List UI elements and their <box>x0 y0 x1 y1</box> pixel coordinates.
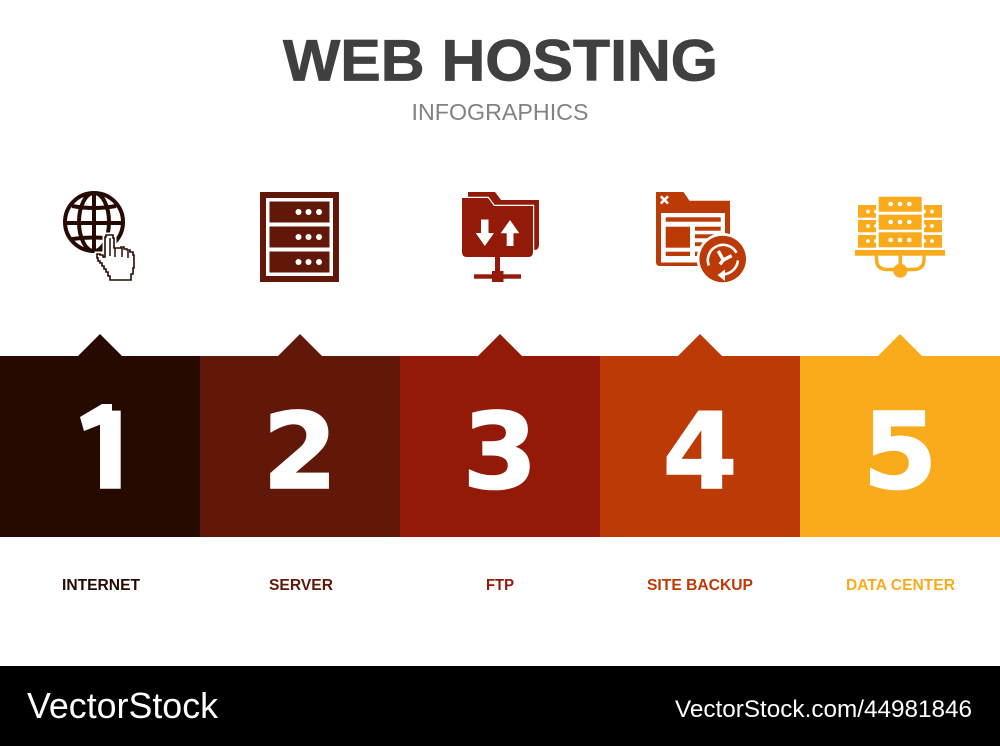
title: WEB HOSTING <box>283 28 718 94</box>
label: internet: INTERNET <box>62 577 141 594</box>
footer url: VectorStock.com/44981846 <box>675 696 972 723</box>
panel: step 1: 1 <box>52 391 156 513</box>
label: server: SERVER <box>269 577 333 594</box>
subtitle: INFOGRAPHICS <box>412 99 588 125</box>
panel: step 3 <box>400 334 600 537</box>
panel: step 1 <box>0 334 200 537</box>
label: ftp: FTP <box>486 577 514 594</box>
label: data center: DATA CENTER <box>846 577 955 594</box>
icon: data center <box>855 194 945 278</box>
panel: step 5 <box>800 334 1000 537</box>
label: site backup: SITE BACKUP <box>647 577 753 594</box>
panel: step 2 <box>200 334 400 537</box>
panel: step 5: 5 <box>862 391 938 513</box>
panel: step 2: 2 <box>262 391 338 513</box>
footer logo text: VectorStock <box>27 685 219 726</box>
panel: step 4 <box>600 334 800 537</box>
panel: step 4: 4 <box>662 391 738 513</box>
icon: internet globe with pointer hand <box>65 193 134 280</box>
icon: server rack <box>260 192 339 282</box>
footer bar <box>0 666 1000 746</box>
icon: ftp folder with arrows <box>462 192 539 282</box>
icon: site backup window with clock <box>656 192 749 285</box>
panel: step 3: 3 <box>462 391 538 513</box>
